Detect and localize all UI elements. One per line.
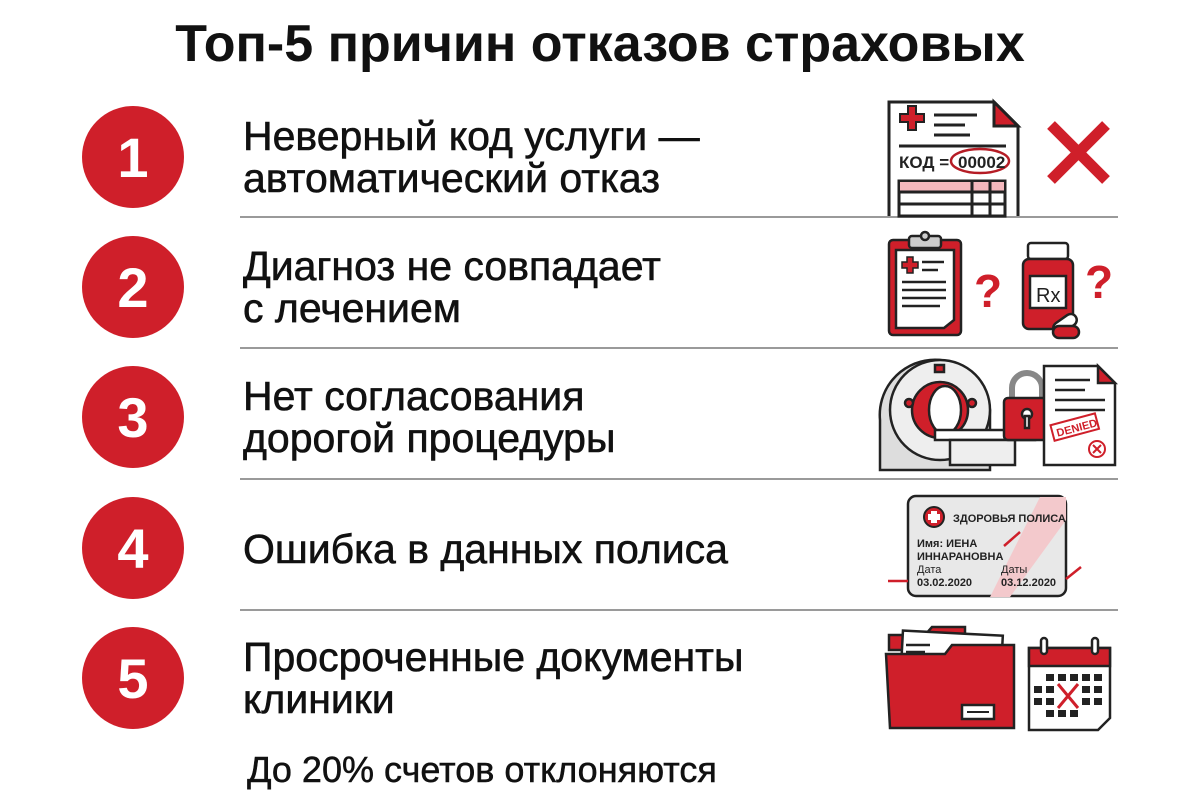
- icon: question marks: ?: [974, 265, 1002, 317]
- row texts: клиники: [243, 676, 395, 722]
- icon: policy card: [888, 496, 1081, 597]
- number circles: 1: [117, 126, 149, 189]
- icon: document with code: [889, 102, 1018, 216]
- icon: pill bottle: [1023, 243, 1079, 338]
- icon: policy card: Дата: [917, 564, 942, 576]
- row texts: [243, 113, 743, 722]
- title: Топ-5 причин отказов страховых: [175, 15, 1025, 73]
- icon: clipboard: [889, 232, 961, 335]
- row texts: дорогой процедуры: [243, 415, 615, 461]
- row texts: Нет согласования: [243, 373, 584, 419]
- number circles: [82, 106, 184, 729]
- number circles: 5: [117, 647, 149, 710]
- icon: policy card: 03.12.2020: [1001, 577, 1056, 589]
- icon: denied document: DENIED: [1055, 417, 1099, 440]
- icon: calendar: [1029, 638, 1110, 730]
- icon: policy card: 03.02.2020: [917, 577, 972, 589]
- icon: question marks: ?: [1085, 256, 1113, 308]
- icon: question marks: [974, 256, 1113, 317]
- icon: document with code: 00002: [958, 153, 1005, 172]
- number circles: 2: [117, 256, 149, 319]
- row texts: с лечением: [243, 285, 461, 331]
- icon: MRI scanner: [880, 360, 1035, 470]
- row texts: Ошибка в данных полиса: [243, 526, 728, 572]
- footer note: До 20% счетов отклоняются: [247, 749, 717, 790]
- row texts: Неверный код услуги —: [243, 113, 700, 159]
- icon: denied document: [1044, 366, 1115, 465]
- icon: document with code: КОД =: [899, 153, 949, 172]
- row texts: Просроченные документы: [243, 634, 743, 680]
- number circles: 4: [117, 517, 149, 580]
- row texts: Диагноз не совпадает: [243, 243, 661, 289]
- icon: policy card: Даты: [1001, 564, 1027, 576]
- row texts: автоматический отказ: [243, 155, 660, 201]
- icon: policy card: Имя: ИЕНА: [917, 538, 977, 550]
- icon: red cross: [1051, 125, 1106, 180]
- icon: pill bottle: Rx: [1036, 285, 1060, 307]
- icon: padlock: [1004, 373, 1050, 440]
- icon: policy card: ЗДОРОВЬЯ ПОЛИСА: [953, 513, 1066, 525]
- icon: folder: [886, 627, 1014, 728]
- icon: policy card: ИННАРАНОВНА: [917, 551, 1003, 563]
- number circles: 3: [117, 386, 149, 449]
